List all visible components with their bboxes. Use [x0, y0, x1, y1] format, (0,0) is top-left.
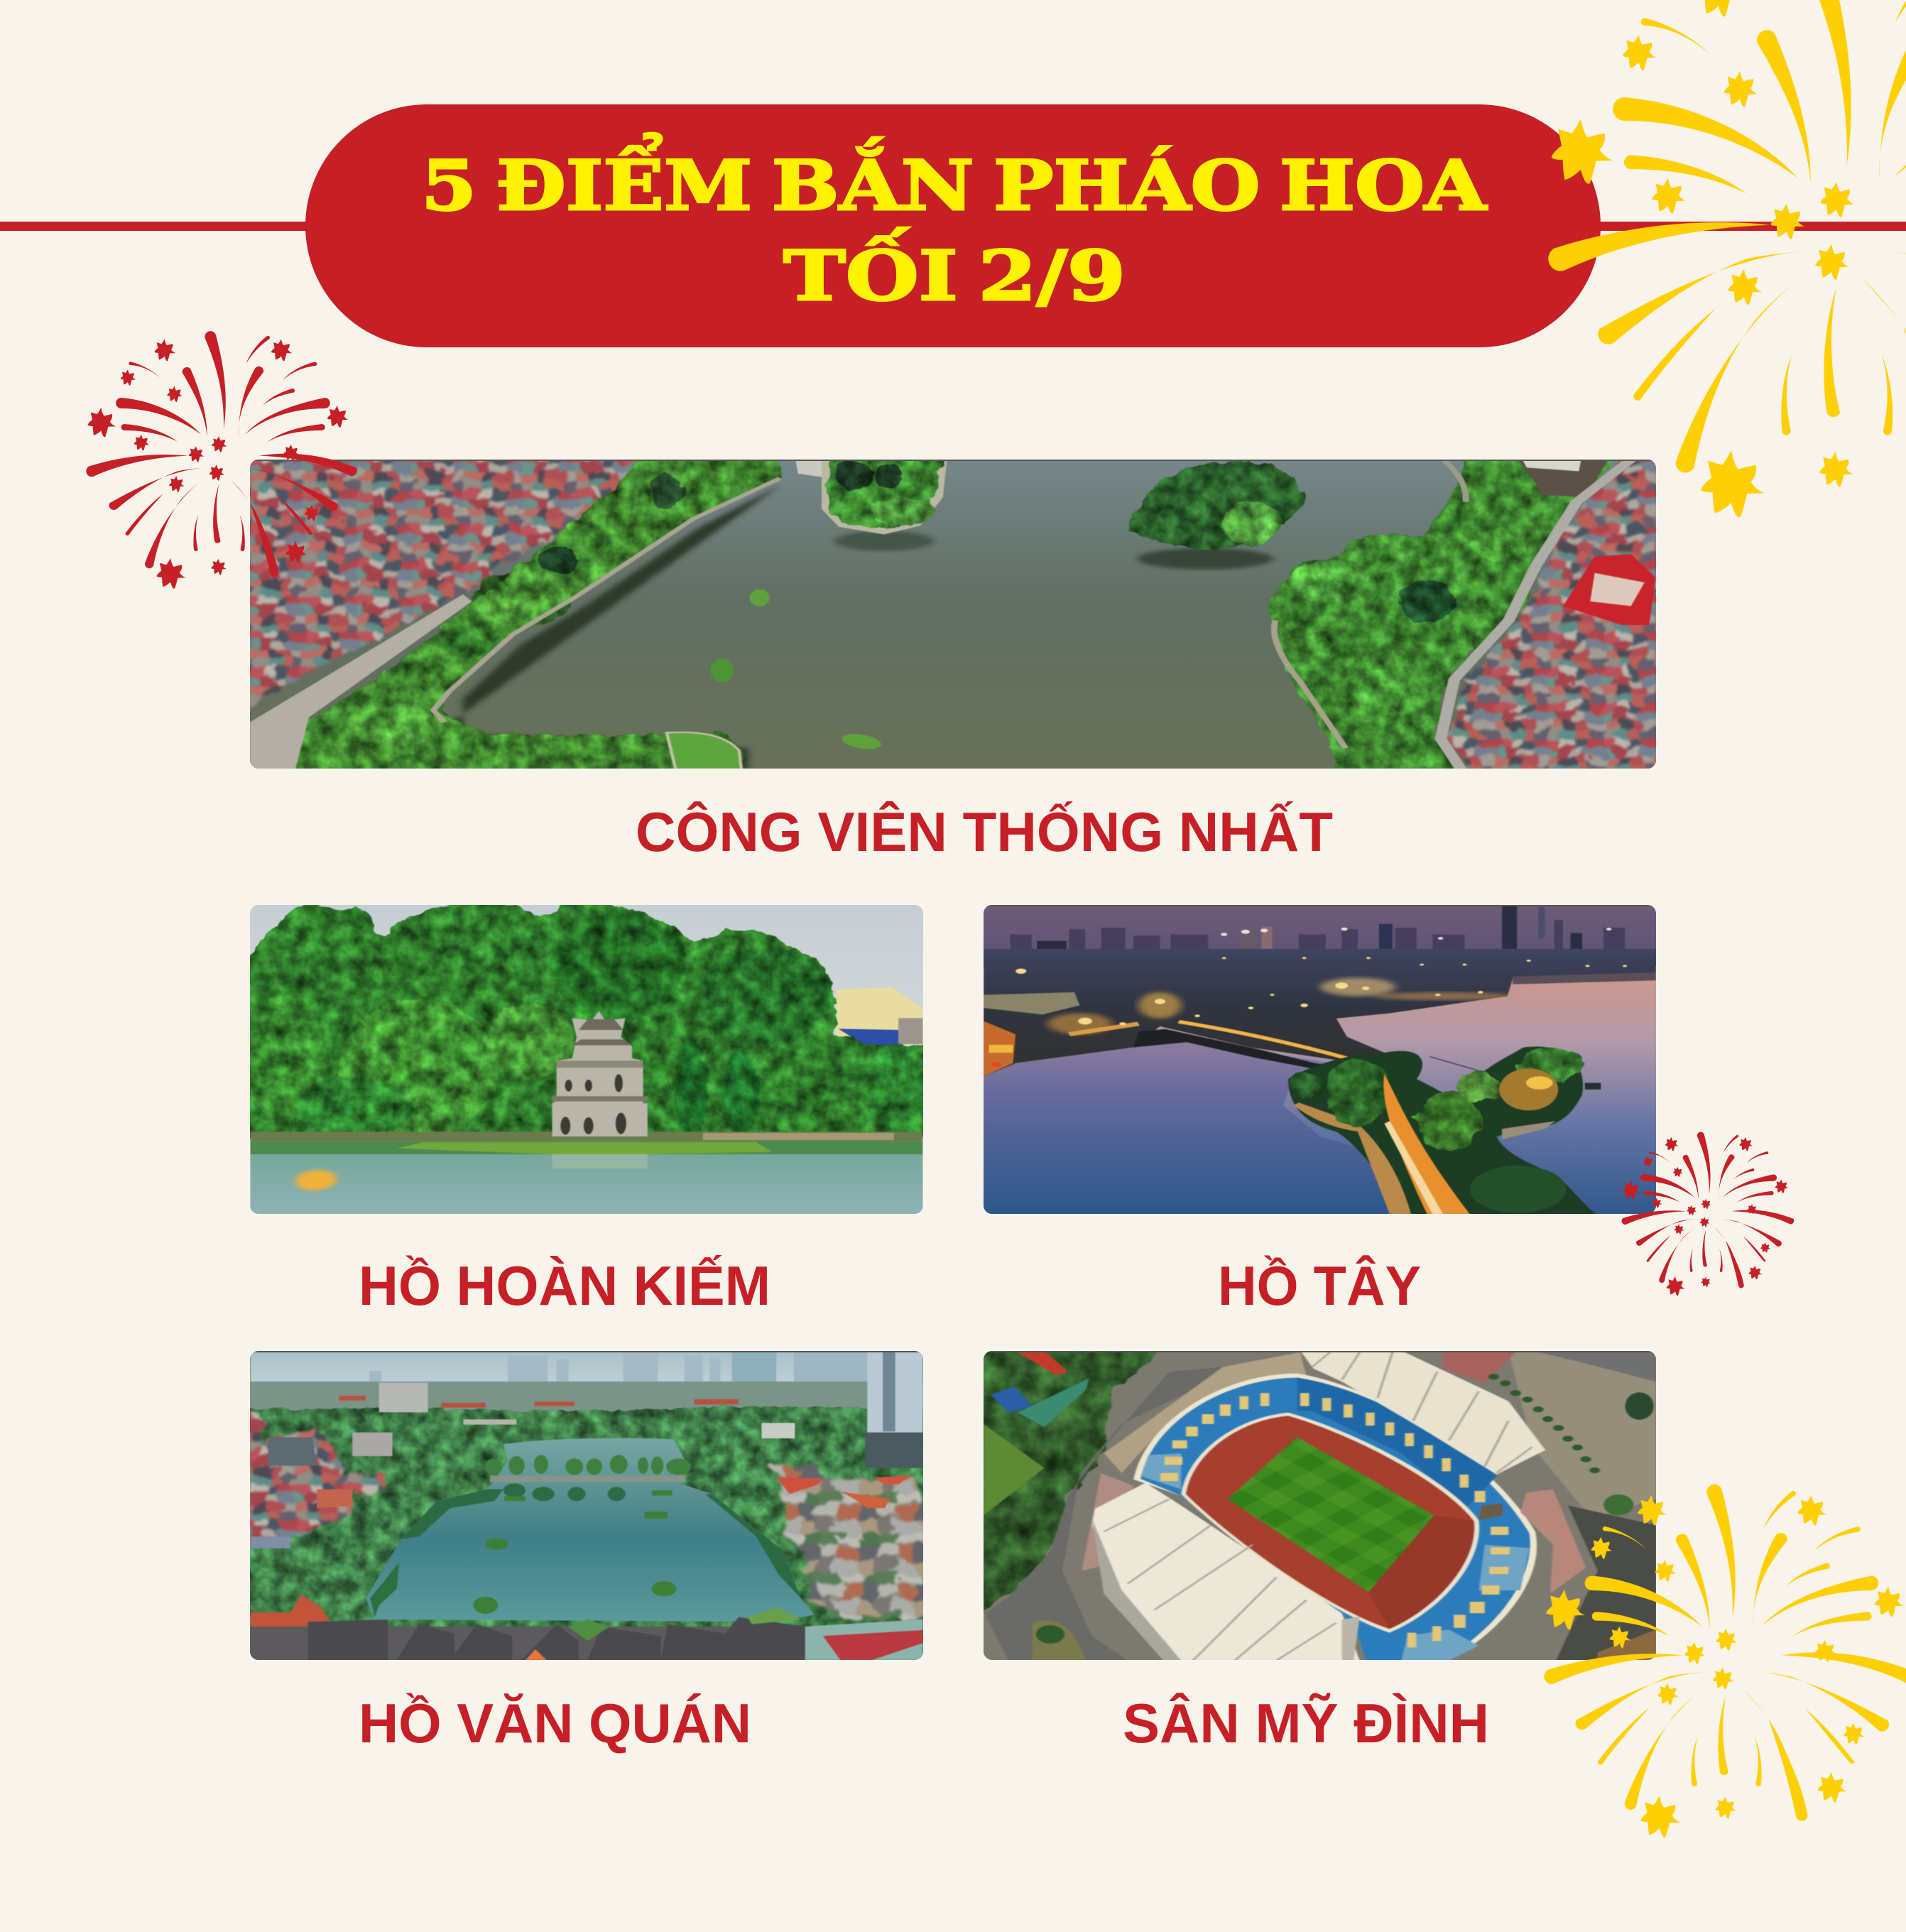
- firework: small red, right of Hồ Tây: [1622, 1132, 1794, 1296]
- photo: Hồ Tây at dusk: [984, 905, 1656, 1215]
- header rule: [0, 222, 1906, 231]
- caption: Hồ Văn Quán: HỒ VĂN QUÁN: [359, 1692, 751, 1754]
- title text: 5 ĐIỂM BẮN PHÁO HOA: [421, 134, 1488, 226]
- caption: Hồ Tây: HỒ TÂY: [1218, 1254, 1421, 1317]
- firework: yellow, top right: [1548, 0, 1906, 517]
- photo: Hồ Hoàn Kiếm with Turtle Tower: [241, 902, 934, 1215]
- title text: TỐI 2/9: [783, 228, 1126, 316]
- photo: Công viên Thống Nhất aerial lake: [232, 445, 1685, 776]
- title text: [421, 134, 1488, 316]
- caption: Công viên Thống Nhất: CÔNG VIÊN THỐNG NHẤT: [636, 801, 1333, 863]
- photo: Sân Mỹ Đình stadium aerial: [967, 1342, 1656, 1661]
- photo: Hồ Văn Quán aerial: [233, 1351, 943, 1661]
- firework: yellow, bottom right: [1544, 1485, 1906, 1838]
- firework: red, top left: [86, 331, 357, 589]
- caption: Hồ Hoàn Kiếm: HỒ HOÀN KIẾM: [359, 1254, 770, 1317]
- caption: Sân Mỹ Đình: SÂN MỸ ĐÌNH: [1123, 1692, 1489, 1754]
- title banner: [305, 104, 1601, 347]
